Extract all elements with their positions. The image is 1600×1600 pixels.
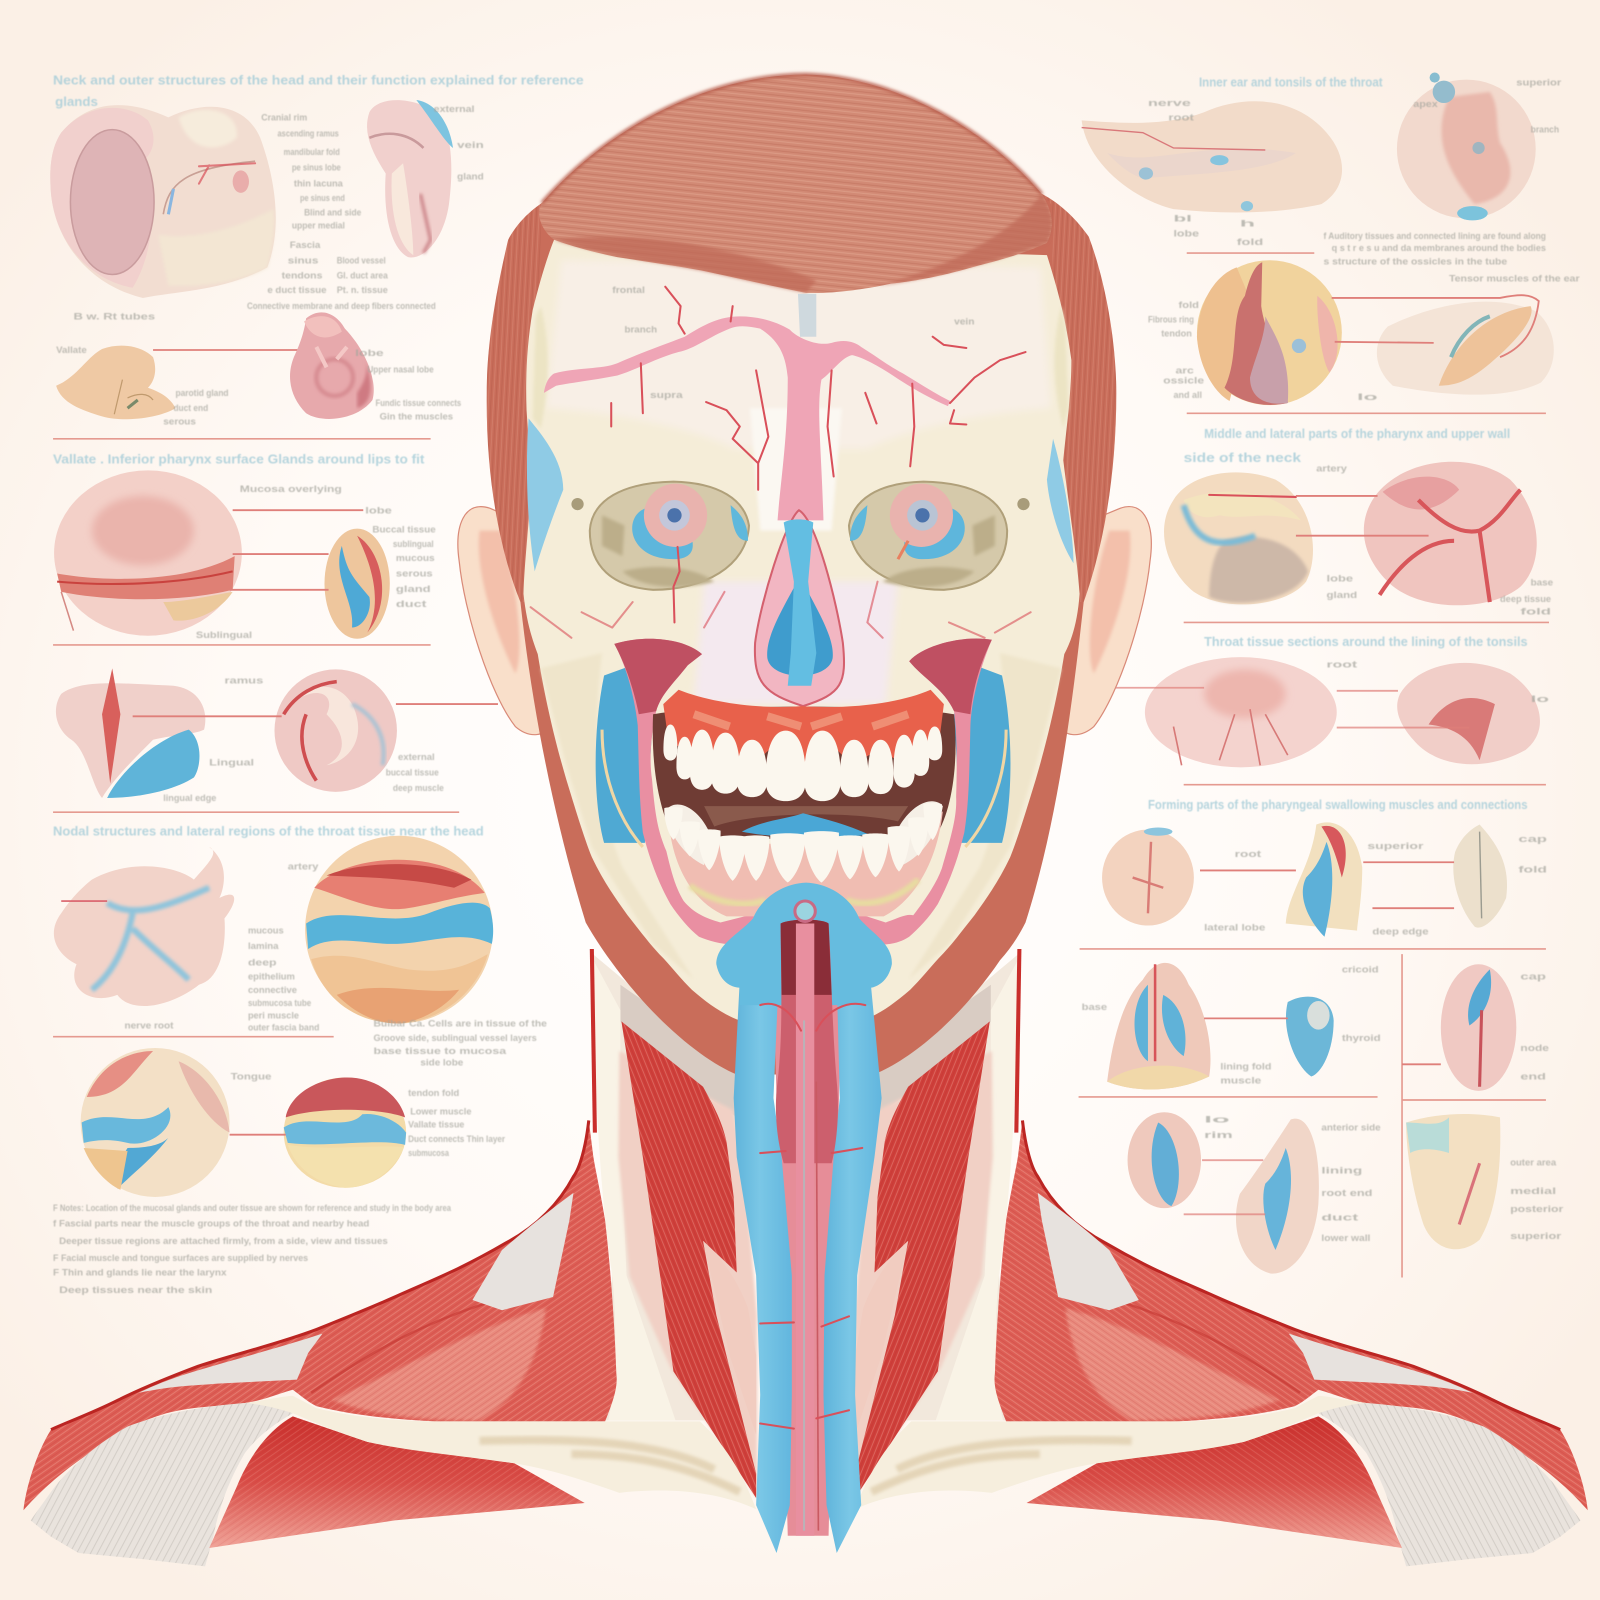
labels: wedge row: fold [1518,864,1547,874]
panel: right top organ cluster [1082,72,1580,405]
labels: gland row: duct end [173,403,208,413]
labels: layered section: epithelium [248,972,295,982]
connector lines [230,510,363,590]
labels: gland row: parotid gland [176,388,229,398]
labels: mottled row: lobe [1327,574,1353,584]
labels: large section: gland [457,172,484,182]
divider [1184,784,1546,786]
labels: large section: Blood vessel [337,255,386,265]
organ: pink folded section [1397,663,1540,764]
paragraph: left footer notes [53,1203,452,1295]
ear: left [458,507,549,735]
labels: top row: superior [1516,78,1562,88]
labels: pink row: lo [1531,694,1550,704]
labels: wedge row: lateral lobe [1204,923,1265,933]
heading: right third: Throat tissue sections around the lining of the tonsils [1204,634,1528,649]
labels: large section: ascending ramus [278,129,339,139]
labels: large section: pe sinus end [300,193,345,203]
paragraph: left footer notes: Deep tissues near the skin [59,1285,213,1295]
organ: lung-like section [1107,963,1211,1089]
labels: large section: Pt. n. tissue [337,285,388,295]
connector lines [1296,496,1429,536]
organ: small pink section with blue cap [367,100,453,257]
labels: cross section: arc [1176,365,1194,375]
labels: top row: branch [1531,125,1560,135]
labels: layered section: peri muscle [248,1010,299,1020]
paragraph: left footer notes: F Facial muscle and tongue surfaces are supplied by nerves [53,1253,308,1263]
labels: layered section: connective [248,985,297,995]
upper gums [663,690,944,770]
labels: wedge row: cap [1518,834,1548,844]
pink buccal ring [614,638,992,945]
organ: round red-pink section [274,669,397,792]
labels: layered section: nerve root [124,1021,173,1031]
heading: right second: side of the neck [1184,450,1302,465]
labels: lung row: lining fold [1220,1061,1271,1071]
labels: large section: thin lacuna [294,179,344,189]
divider [1184,621,1549,623]
blue cheek panels [596,663,1010,843]
divider [53,811,459,813]
hair: top sweep [539,74,1052,293]
labels: bottom right: anterior side [1321,1123,1381,1133]
labels: cross section [1148,300,1379,402]
divider [1187,412,1546,414]
lower side teeth mass [665,801,943,865]
labels: ellipse row: Buccal tissue [372,525,436,535]
dividers [1079,1097,1546,1100]
labels: lung row: muscle [1220,1076,1261,1086]
labels: top row: lobe [1173,229,1199,239]
organ: beige elongated section [1082,101,1342,213]
labels: cross section: and all [1173,390,1202,400]
connector [230,1134,286,1136]
divider [53,1036,334,1038]
labels: layered section: Groove side, sublingual vessel layers [373,1033,537,1043]
labels: mottled row: base [1531,578,1553,588]
organ: blue and yellow wedge [1286,822,1362,937]
connector lines [1200,862,1454,908]
labels: bottom right [1204,1114,1564,1243]
labels: cross section: fold [1179,300,1199,310]
labels: mottled row: artery [1316,463,1348,473]
panel: right middle cluster [1112,426,1553,785]
labels: ellipse row: lobe [365,505,392,515]
labels: wedge row: root [1235,849,1261,859]
paragraph: left footer notes: F Notes: Location of the mucosal glands and outer tissue are shown for reference and study in the body area [53,1203,452,1213]
heading: left third: Nodal structures and lateral regions of the throat tissue near the head [53,824,484,839]
labels: second row: external [398,752,435,762]
eye: left [590,482,749,622]
labels: layered section: submucosa tube [248,998,311,1008]
muscle root strands [614,638,992,714]
labels: bottom row: side lobe [420,1057,463,1067]
labels: large section: Fascia [290,240,321,250]
organ: layered round section [305,836,493,1023]
labels: top row [1148,78,1580,284]
organ: mottled section [1164,472,1313,604]
divider [1080,948,1546,950]
heading: left top [53,73,584,109]
labels: large section: Gl. duct area [337,271,389,281]
organ: round cross section [1197,260,1342,405]
labels: bottom right: lining [1321,1165,1362,1175]
heading: right top: Inner ear and tonsils of the throat [1199,75,1383,90]
labels: mottled row: gland [1327,590,1357,600]
labels: lung row: cricoid [1342,964,1379,974]
paragraph: left footer notes: Deeper tissue regions are attached firmly, from a side, view and tissues [59,1236,388,1246]
organ: beige section with wing [1377,302,1554,395]
organ: pink section with blue wedge [56,668,205,798]
labels: layered section: Bulbar Ca. Cells are in tissue of the [373,1019,547,1029]
heading: right fourth: Forming parts of the pharyngeal swallowing muscles and connections [1148,797,1528,812]
organ: round beige and blue section [81,1048,230,1197]
labels: large section: vein [457,140,484,150]
heading: left top: Neck and outer structures of the head and their function explained for reference [53,73,584,88]
labels: ellipse row: serous [396,569,433,579]
nose [755,510,844,706]
labels: bottom right: lo [1204,1114,1231,1124]
labels: gland row: Gin the muscles [380,411,453,421]
labels: lung row: base [1082,1002,1107,1012]
heading: left top: glands [55,94,98,109]
connector lines [1184,1160,1265,1214]
heading: right second [1184,426,1510,465]
mouth [596,638,1010,945]
labels: bottom right: outer area [1510,1157,1557,1167]
labels: lung row: thyroid [1342,1033,1381,1043]
organ: peach gland [56,346,176,419]
labels: bottom row: Tongue [231,1072,271,1082]
organ: round peach [1102,828,1194,926]
labels: second row: Lingual [209,757,254,767]
labels: second row: deep muscle [393,783,444,793]
labels: lung row: node [1520,1043,1549,1053]
labels: top row: nerve [1148,98,1191,108]
labels: bottom right: rim [1204,1130,1233,1140]
labels: wedge row [1204,834,1548,937]
hair: side columns and facial muscle band [487,194,1116,1074]
organ: small blue-cored oval [324,529,390,639]
divider: vertical [1401,954,1403,1278]
labels: gland row: lobe [355,348,384,358]
labels: bottom right: duct [1321,1212,1358,1222]
organ: vertical pink tube [1441,964,1516,1091]
forehead labels: vein [954,316,975,326]
labels: layered section: deep [248,957,277,967]
neck center tissue [773,980,842,1536]
labels: wedge row: superior [1367,841,1424,851]
organ: red vessel section [1364,462,1537,605]
labels: bottom right: lower wall [1321,1233,1370,1243]
cheek nerve lines [602,730,1006,847]
labels: top row: fold [1237,237,1263,247]
heading: right second: Middle and lateral parts of the pharynx and upper wall [1204,426,1510,441]
labels: ellipse row: duct [396,599,427,609]
labels: gland row [56,311,461,426]
labels: bottom row: Vallate tissue [408,1120,464,1130]
labels: gland row: Upper nasal lobe [367,364,434,374]
paragraph: left footer notes: F Thin and glands lie near the larynx [53,1268,228,1278]
labels: gland row: Vallate [56,345,87,355]
labels: second row: buccal tissue [386,768,439,778]
hyoid cartilage [716,883,892,1536]
labels: pink row [1327,659,1550,704]
forehead labels: supra [650,390,684,400]
labels: bottom row: submucosa [408,1148,450,1158]
organ: round tissue section [1397,72,1536,220]
panel: left top organ cluster [50,73,584,426]
labels: large section: Connective membrane and deep fibers connected [247,301,436,311]
labels: bottom row: Duct connects Thin layer [408,1134,505,1144]
divider [53,644,431,646]
labels: top row: root [1168,112,1194,122]
connector lines [1204,1018,1441,1064]
organ: pale pink ellipse [1145,657,1337,767]
labels: wedge row: deep edge [1372,927,1429,937]
labels: layered section [124,861,547,1056]
labels: layered section: lamina [248,941,280,951]
organ: beige block [1406,1114,1500,1249]
connector line [153,349,298,351]
trachea: blue tubes [734,980,882,1553]
labels: top row: q s t r e s u and da membranes around the bodies [1332,243,1546,253]
labels: top row: h [1240,219,1256,229]
labels: layered section: outer fascia band [248,1023,319,1033]
labels: second row: ramus [224,676,263,686]
back teeth shading [704,806,908,827]
heading: left second: Vallate . Inferior pharynx surface Glands around lips to fit [53,451,425,466]
organ: blue-cored oval [1128,1112,1201,1208]
labels: large section: upper medial [292,221,345,231]
labels: large section: external [434,104,474,114]
connector lines [1112,688,1469,728]
labels: cross section: lo [1357,392,1379,402]
skull: cranium and jaw [523,240,1080,1027]
labels: large section [247,104,484,311]
labels: ellipse row: Sublingual [196,630,252,640]
organ: large cross section [50,105,276,298]
forehead labels: branch [624,325,658,335]
labels: cross section: ossicle [1163,376,1204,386]
eye: right [849,482,1007,590]
labels: lung row: cap [1520,972,1547,982]
organ: slim beige leaf [1453,824,1507,928]
labels: large section: Blind and side [304,207,361,217]
ear: right [1060,507,1151,735]
labels: top row: Tensor muscles of the ear [1449,274,1580,284]
paragraph: left footer notes: f Fascial parts near the muscle groups of the throat and nearby head [53,1219,369,1229]
labels: cross section: Fibrous ring [1148,314,1194,324]
labels: second row: lingual edge [163,793,216,803]
labels: ellipse row: mucous [396,553,435,563]
labels: layered section: base tissue to mucosa [373,1046,507,1056]
labels: mottled row: fold [1520,606,1551,616]
labels: large section: pe sinus lobe [292,162,341,172]
organ: layered ellipse [284,1078,406,1188]
labels: large section: e duct tissue [267,285,327,295]
labels: large section: sinus [288,255,318,265]
labels: ellipse row: gland [396,584,431,594]
labels: top row: apex [1413,99,1439,109]
labels: bottom row [231,1057,505,1158]
divider [53,438,431,440]
labels: bottom row: Lower muscle [410,1106,471,1116]
labels: ellipse row: sublingual [393,539,434,549]
labels: layered section: mucous [248,926,284,936]
skull foramina [571,498,1030,510]
lower gum [668,811,943,916]
lower teeth [664,803,942,883]
labels: pink row: root [1327,659,1357,669]
labels: bottom right: superior [1510,1231,1562,1241]
labels: mottled row: deep tissue [1500,594,1551,604]
labels: large section: Cranial rim [261,112,307,122]
panel: left lower organ cluster [53,824,547,1295]
labels: large section: tendons [282,271,322,281]
labels: lung row: end [1520,1072,1546,1082]
organ: blue cube [1286,997,1334,1077]
forehead arteries [531,287,1031,638]
panel: left eyes and ear cross sections [53,451,498,803]
labels: bottom row: tendon fold [408,1088,459,1098]
forehead labels [612,285,975,400]
panel: right lower cluster [1079,797,1564,1278]
labels: bottom right: medial [1510,1186,1556,1196]
labels: lung row [1082,964,1549,1086]
neck and shoulders [23,949,1588,1566]
labels: bottom right: root end [1321,1188,1372,1198]
vessels on the trachea [760,1004,865,1531]
labels: top row: bl [1173,213,1192,223]
organ: pink spiral gland [290,312,374,419]
labels: gland row: serous [163,416,196,426]
labels: mottled row [1316,463,1553,616]
labels: large section: mandibular fold [284,147,340,157]
labels: ellipse row [196,484,436,640]
connector lines [1332,295,1539,357]
divider [1187,252,1314,254]
forehead labels: frontal [612,285,645,295]
mouth interior [653,707,956,839]
labels: gland row: B w. Rt tubes [73,311,155,321]
upper teeth [663,724,942,801]
labels: cross section: tendon [1161,329,1192,339]
labels: gland row: Fundic tissue connects [376,398,461,408]
labels: top row: f Auditory tissues and connected lining are found along [1323,231,1546,241]
organ: star-shaped section [54,847,234,1006]
connector lines [133,704,498,716]
tongue [742,813,869,837]
labels: second row [163,676,444,803]
labels: layered section: artery [288,861,319,871]
labels: bottom right: posterior [1510,1204,1564,1214]
organ: pink ellipse with red band [54,470,242,636]
labels: ellipse row: Mucosa overlying [240,484,342,494]
organ: elongated blue-cored section [1236,1119,1319,1274]
labels: top row: s structure of the ossicles in the tube [1323,256,1507,266]
